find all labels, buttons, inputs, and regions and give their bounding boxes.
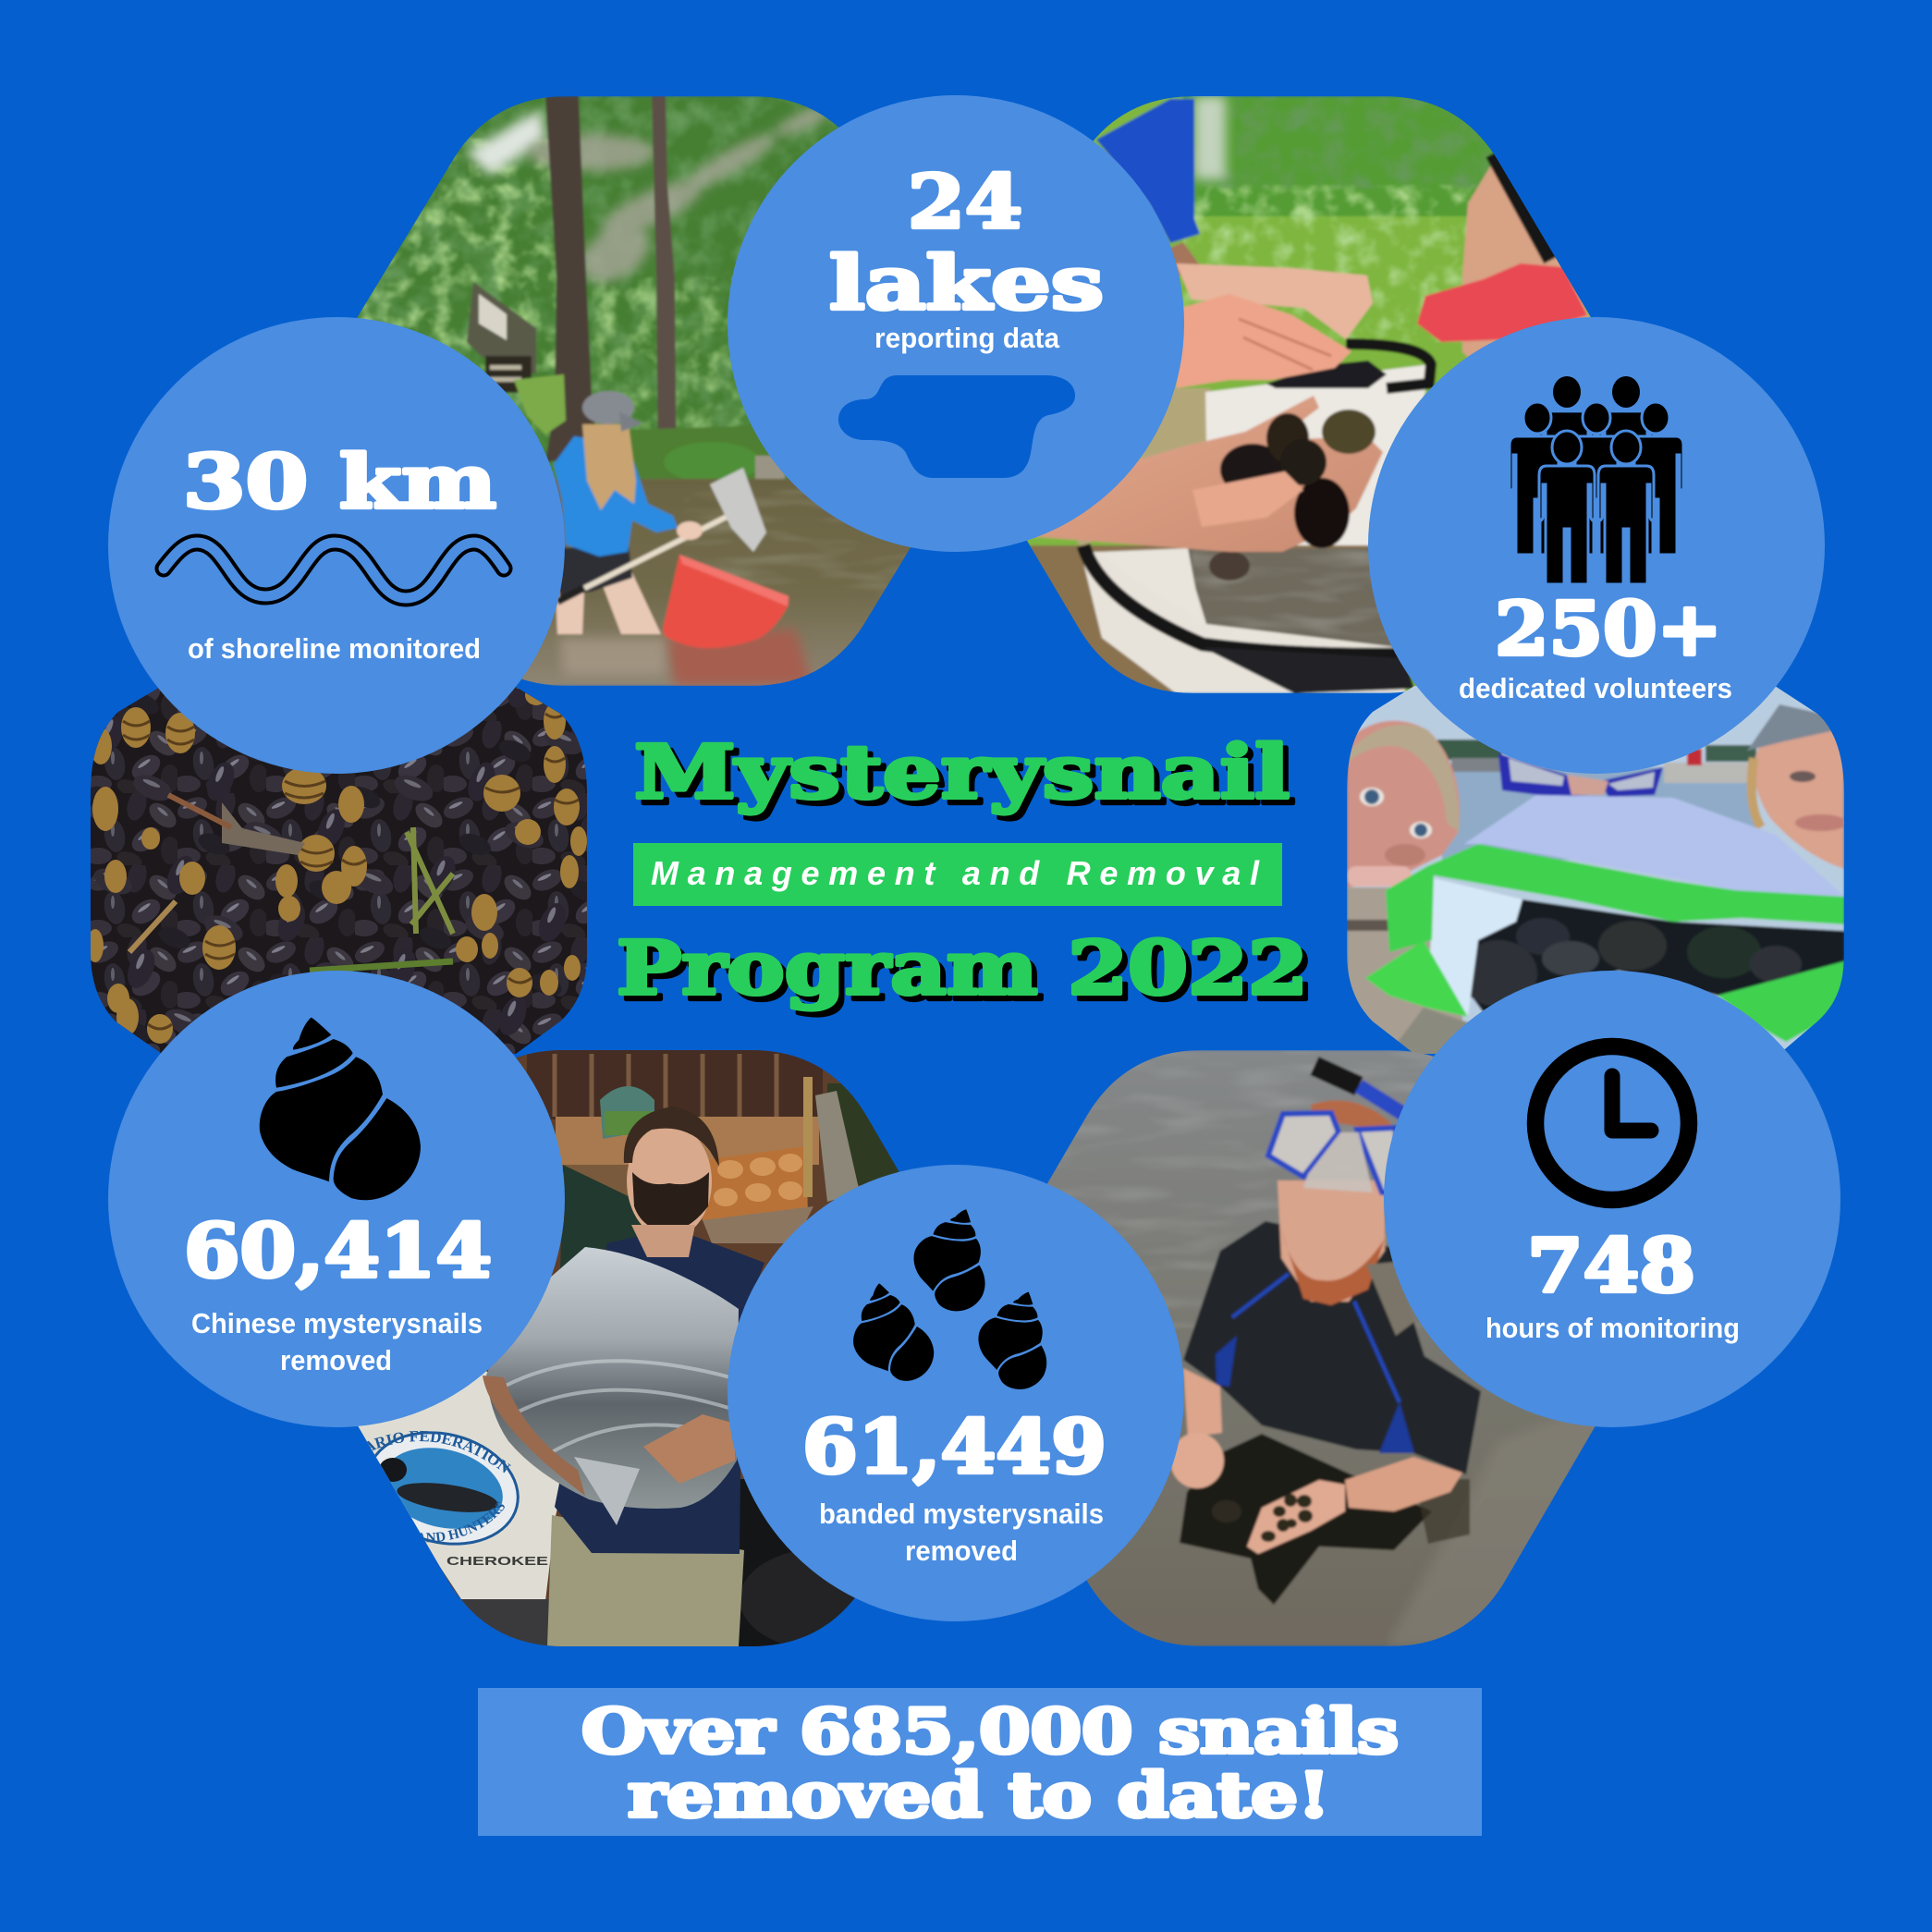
stat: 30 km: 30 km (183, 438, 496, 525)
label: reporting data: reporting data (874, 322, 1060, 354)
stat: 250+: 250+ (1495, 585, 1722, 672)
icon: Chinese mysterysnail shell (260, 1018, 421, 1200)
icon: lake (838, 375, 1075, 478)
photo: woman with net and red bucket in lake (357, 96, 911, 686)
icon: three banded mysterysnail shells (853, 1197, 1075, 1399)
label: hours of monitoring: hours of monitoring (1486, 1312, 1740, 1344)
label: banded mysterysnails removed (819, 1498, 1104, 1567)
photo text: logo and car badge: ARIO FEDERATION (367, 1431, 511, 1473)
photo text: logo and car badge: AND HUNTERS (420, 1501, 505, 1542)
label: banded mysterysnails removed: removed (905, 1535, 1018, 1567)
photo: snorkeller holding snails in water (1046, 1050, 1596, 1646)
label: of shoreline monitored: of shoreline monitored (188, 632, 481, 665)
stat: lakes: lakes (829, 239, 1104, 326)
icon: shoreline wave (164, 543, 504, 598)
circle: 24 lakes reporting data (728, 95, 1184, 552)
stat: 24: 24 (908, 158, 1022, 245)
stat: 60,414: 60,414 (184, 1207, 492, 1294)
photo: man carrying bag of snails (358, 1050, 899, 1646)
photo: hands holding snails over bucket (1026, 96, 1591, 693)
subtitle banner: Management and Removal: Management and Removal (651, 854, 1260, 892)
circle: 30 km of shoreline monitored (108, 317, 565, 774)
callout: total snails removed: Over 685,000 snails (581, 1695, 1399, 1767)
photo: volunteers with mesh bag of snails (1347, 684, 1847, 1057)
title: Program 2022: Program 2022 (617, 924, 1308, 1011)
photo text: logo and car badge: CHEROKEE (446, 1554, 548, 1568)
circle: 60,414 Chinese mysterysnails removed (108, 971, 565, 1427)
title: Mysterysnail: Mysterysnail (634, 728, 1290, 815)
label: Chinese mysterysnails removed (191, 1307, 483, 1376)
callout: total snails removed (478, 1688, 1482, 1836)
circle: 748 hours of monitoring (1384, 971, 1840, 1427)
photo text: logo and car badge (367, 1431, 547, 1565)
subtitle banner: Management and Removal (633, 843, 1282, 906)
icon: group of people (1510, 376, 1683, 584)
stat: 61,449: 61,449 (802, 1403, 1107, 1490)
photo: pile of snails (87, 684, 587, 1054)
label: dedicated volunteers: dedicated volunteers (1459, 672, 1732, 704)
circle: 250+ dedicated volunteers (1368, 317, 1825, 774)
stat: 748: 748 (1527, 1222, 1695, 1309)
callout: total snails removed: removed to date! (628, 1759, 1330, 1831)
label: banded mysterysnails removed: banded mysterysnails (819, 1498, 1104, 1530)
label: Chinese mysterysnails removed: removed (280, 1344, 392, 1376)
label: Chinese mysterysnails removed: Chinese mysterysnails (191, 1307, 483, 1339)
circle: 61,449 banded mysterysnails removed (728, 1165, 1184, 1621)
icon: clock (1535, 1046, 1689, 1200)
